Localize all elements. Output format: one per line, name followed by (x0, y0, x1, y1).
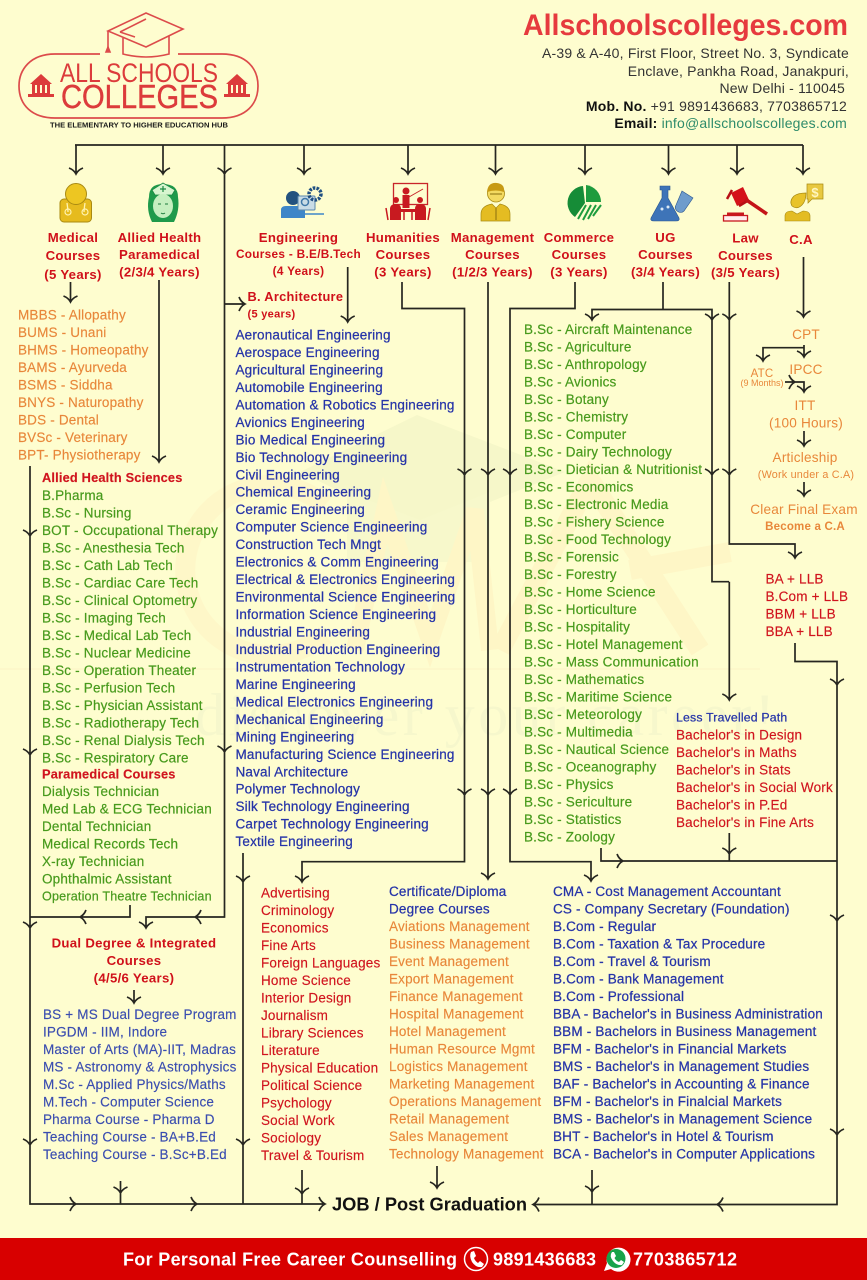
arrow: humanities list to job (295, 1170, 309, 1204)
list: medical: BDS - Dental (18, 412, 99, 428)
icon: C.A (785, 184, 823, 221)
list: UG B.Sc courses: B.Sc - Electronic Media (524, 497, 669, 512)
watermark (0, 415, 778, 748)
list: commerce: CMA - Cost Management Accountant (553, 884, 781, 899)
final exam: Clear Final Exam (750, 502, 858, 517)
heading: UG: UG (655, 230, 676, 245)
heading: allied health: (2/3/4 Years) (119, 264, 200, 280)
ATC: ATC (751, 368, 773, 380)
B. Architecture heading: B. Architecture (248, 289, 343, 304)
address: A-39 & A-40, First Floor, Street No. 3, Syndicate (542, 45, 849, 61)
heading: humanities: Humanities (366, 230, 440, 245)
list: UG B.Sc courses: B.Sc - Fishery Science (524, 514, 665, 530)
list: UG B.Sc courses (524, 322, 702, 844)
list: UG B.Sc courses: B.Sc - Agriculture (524, 340, 632, 354)
list: law integrated: B.Com + LLB (766, 589, 848, 604)
icon: humanities (386, 184, 430, 220)
list: allied health sciences: B.Sc - Renal Dialysis Tech (42, 733, 205, 748)
heading: management: Management (451, 230, 535, 245)
list: management: Marketing Management (389, 1076, 534, 1092)
icon: UG flask (651, 186, 693, 221)
CPT: CPT (792, 327, 820, 342)
icon: management (481, 183, 510, 221)
heading: commerce: Commerce (544, 230, 614, 245)
list: dual degree: Pharma Course - Pharma D (43, 1112, 215, 1127)
logo: left building (28, 74, 54, 97)
list: paramedical courses: Dialysis Technician (42, 784, 159, 799)
list: commerce: BFM - Bachelor's in Finalcial Markets (553, 1094, 782, 1109)
list: commerce: BCA - Bachelor's in Computer Applications (553, 1146, 815, 1162)
arrow: allied health to list (152, 280, 166, 462)
list: UG B.Sc courses: B.Sc - Physics (524, 777, 614, 792)
list: engineering: Automation & Robotics Engineering (236, 397, 455, 412)
list: management: Human Resource Mgmt (389, 1042, 535, 1056)
Articleship note: (Work under a C.A) (758, 469, 854, 481)
list: management: Finance Management (389, 989, 523, 1004)
contact header (523, 9, 849, 131)
list: engineering: Industrial Production Engineering (236, 642, 440, 657)
list: humanities: Criminology (261, 903, 334, 918)
arrow: dual degree heading to list (127, 990, 141, 1003)
list: management: Logistics Management (389, 1059, 528, 1074)
list: allied health sciences: B.Sc - Clinical Optometry (42, 593, 197, 608)
address: Email: info@allschoolscolleges.com (614, 115, 847, 131)
list: allied health sciences: B.Sc - Radiotherapy Tech (42, 716, 199, 730)
list: engineering: Textile Engineering (236, 834, 353, 849)
connector: law (722, 282, 802, 700)
connector: top bar with arrows to categories (69, 145, 810, 174)
list: UG B.Sc courses: B.Sc - Hotel Management (524, 637, 683, 652)
list: commerce: B.Com - Regular (553, 919, 657, 934)
list: management: Hospital Management (389, 1006, 524, 1022)
address: Mob. No. +91 9891436683, 7703865712 (586, 98, 847, 114)
list: allied health sciences (42, 470, 218, 766)
list: engineering: Mechanical Engineering (236, 712, 384, 727)
heading: humanities (366, 230, 440, 280)
list: dual degree: M.Sc - Applied Physics/Maths (43, 1077, 226, 1092)
arrow: commerce list to job (585, 1170, 599, 1204)
list: law integrated: BBM + LLB (766, 606, 836, 622)
job / post graduation: JOB / Post Graduation (332, 1194, 527, 1214)
connector: left trunk to job (23, 466, 325, 1211)
list: UG B.Sc courses: B.Sc - Nautical Science (524, 742, 669, 757)
list: allied health sciences: B.Pharma (42, 488, 104, 503)
list: allied health sciences: B.Sc - Cath Lab Tech (42, 558, 173, 573)
list: allied health sciences: B.Sc - Perfusion Tech (42, 680, 175, 696)
heading: commerce: Courses (552, 247, 606, 262)
heading: medical courses: Courses (46, 248, 100, 263)
list: UG B.Sc courses: B.Sc - Zoology (524, 830, 615, 844)
list: commerce: BFM - Bachelor's in Financial Markets (553, 1042, 787, 1056)
become a C.A: Become a C.A (765, 521, 845, 533)
list: allied health sciences: B.Sc - Medical Lab Tech (42, 628, 191, 643)
B. Architecture heading: (5 years) (248, 309, 295, 321)
arrow: C.A to CPT (796, 257, 810, 317)
list: UG B.Sc courses: B.Sc - Hospitality (524, 620, 630, 634)
Articleship: Articleship (773, 450, 837, 465)
list: engineering: Medical Electronics Engineering (236, 694, 433, 709)
list: allied health sciences: BOT - Occupational Therapy (42, 523, 218, 538)
sub-heading: allied health sciences: Allied Health Sciences (42, 470, 183, 485)
list: commerce: B.Com - Travel & Tourism (553, 954, 711, 969)
heading: medical courses: (5 Years) (44, 267, 102, 282)
list: commerce: B.Com - Bank Management (553, 972, 724, 986)
list: engineering: Aerospace Engineering (236, 345, 380, 360)
list: less travelled path: Bachelor's in Fine Arts (676, 815, 814, 830)
arrow: dual degree list to job (114, 1181, 128, 1204)
IPCC: IPCC (789, 362, 823, 377)
sub-list: certificate and degree: Degree Courses (389, 902, 490, 916)
list: medical: MBBS - Allopathy (18, 308, 126, 322)
list: management: Aviations Management (389, 919, 530, 934)
connector: humanities (295, 282, 472, 882)
heading: engineering: Courses - B.E/B.Tech (236, 247, 361, 261)
list: commerce: BHT - Bachelor's in Hotel & Tourism (553, 1129, 774, 1144)
list: engineering: Industrial Engineering (236, 624, 370, 640)
arrow: less travelled (722, 833, 736, 861)
list: engineering: Chemical Engineering (236, 485, 371, 500)
list: engineering: Construction Tech Mngt (236, 537, 381, 552)
list: engineering: Marine Engineering (236, 677, 356, 692)
list: commerce: BAF - Bachelor's in Accounting & Finance (553, 1076, 810, 1092)
list: humanities: Interior Design (261, 990, 352, 1006)
heading: law (711, 230, 780, 280)
heading: engineering: Engineering (259, 230, 338, 245)
phone number: 9891436683 (493, 1250, 596, 1270)
connector: paramedical to trunk (30, 905, 130, 924)
list: management: Sales Management (389, 1129, 508, 1144)
ITT: ITT (795, 398, 815, 413)
list: law integrated: BBA + LLB (766, 624, 833, 639)
list: humanities: Travel & Tourism (261, 1148, 364, 1163)
list: commerce: B.Com - Taxation & Tax Procedure (553, 936, 765, 952)
heading: UG (631, 230, 700, 280)
dual degree heading (52, 936, 216, 986)
list: paramedical courses: Ophthalmic Assistant (42, 872, 172, 886)
list: engineering: Avionics Engineering (236, 415, 365, 430)
icon: commerce (568, 185, 601, 220)
icon: nurse (148, 183, 178, 222)
whatsapp number: 7703865712 (633, 1250, 737, 1270)
list: commerce: BBA - Bachelor's in Business Administration (553, 1006, 823, 1022)
connector: trunk to dual degree (139, 145, 232, 928)
list: UG B.Sc courses: B.Sc - Forestry (524, 567, 617, 582)
connector: CPT to IPCC and ATC (756, 345, 811, 361)
ATC duration: (9 Months) (740, 378, 784, 388)
list: management: Retail Management (389, 1112, 509, 1126)
list: engineering: Agricultural Engineering (236, 362, 383, 377)
logo: graduation cap (106, 13, 183, 57)
list: management: Business Management (389, 936, 530, 952)
heading: management (451, 230, 535, 280)
heading: allied health: Paramedical (119, 247, 200, 262)
list: UG B.Sc courses: B.Sc - Economics (524, 480, 633, 494)
list: less travelled path: Bachelor's in Maths (676, 745, 797, 760)
icon: whatsapp (604, 1248, 631, 1272)
list: UG B.Sc courses: B.Sc - Multimedia (524, 724, 633, 740)
list: engineering: Automobile Engineering (236, 380, 383, 395)
list: UG B.Sc courses: B.Sc - Botany (524, 392, 609, 407)
list: allied health sciences: B.Sc - Operation Theater (42, 663, 196, 678)
list: allied health sciences: B.Sc - Nuclear Medicine (42, 646, 191, 660)
list: UG B.Sc courses: B.Sc - Home Science (524, 584, 656, 600)
list: dual degree: MS - Astronomy & Astrophysics (43, 1060, 237, 1074)
B. Architecture heading (248, 289, 343, 321)
logo (19, 13, 258, 130)
list: management: Event Management (389, 954, 509, 969)
heading: humanities: Courses (376, 247, 430, 262)
list: medical: BAMS - Ayurveda (18, 360, 127, 375)
heading: commerce (544, 230, 614, 280)
watermark: discover your career! (195, 682, 778, 748)
list: UG B.Sc courses: B.Sc - Anthropology (524, 357, 647, 372)
heading: medical courses (44, 230, 102, 282)
list: humanities: Foreign Languages (261, 956, 380, 970)
list: commerce: BMS - Bachelor's in Management Science (553, 1112, 812, 1126)
list: humanities: Literature (261, 1043, 320, 1058)
sub-list: certificate and degree (389, 884, 507, 916)
icon: law gavel (724, 187, 767, 221)
list: engineering: Polymer Technology (236, 782, 360, 797)
list: management (389, 884, 544, 1162)
list: allied health sciences: B.Sc - Nursing (42, 506, 132, 520)
list: engineering: Information Science Engineering (236, 607, 436, 622)
list: commerce: B.Com - Professional (553, 989, 684, 1004)
list: less travelled path: Bachelor's in Stats (676, 762, 791, 778)
list: engineering: Electrical & Electronics Engineering (236, 572, 455, 587)
list: engineering: Environmental Science Engineering (236, 590, 455, 604)
dual degree heading: Dual Degree & Integrated (52, 936, 216, 950)
connector: zoology to right trunk (601, 848, 837, 868)
list: allied health sciences: B.Sc - Respiratory Care (42, 750, 189, 766)
list: paramedical courses: X-ray Technician (42, 854, 144, 869)
list: humanities: Fine Arts (261, 938, 316, 953)
logo: right building (224, 74, 250, 97)
list: dual degree: M.Tech - Computer Science (43, 1094, 214, 1110)
dual degree heading: Courses (107, 953, 161, 968)
list: UG B.Sc courses: B.Sc - Maritime Science (524, 690, 672, 704)
list: UG B.Sc courses: B.Sc - Mathematics (524, 672, 644, 687)
list: commerce (553, 884, 823, 1162)
sub-heading: less travelled: Less Travelled Path (676, 711, 787, 725)
list: UG B.Sc courses: B.Sc - Sericulture (524, 794, 632, 810)
list: commerce: BMS - Bachelor's in Management Studies (553, 1059, 809, 1074)
list: engineering: Computer Science Engineering (236, 520, 427, 535)
list: UG B.Sc courses: B.Sc - Dairy Technology (524, 444, 672, 460)
list: paramedical courses: Med Lab & ECG Technician (42, 802, 212, 816)
icon: C.A: $ (811, 185, 819, 200)
list: engineering (236, 328, 455, 849)
list: UG B.Sc courses: B.Sc - Meteorology (524, 707, 642, 722)
list: UG B.Sc courses: B.Sc - Dietician & Nutritionist (524, 462, 702, 477)
address (542, 45, 849, 131)
icon: phone (464, 1248, 488, 1270)
list: medical: BVSc - Veterinary (18, 430, 128, 445)
list: engineering: Silk Technology Engineering (236, 799, 410, 814)
list: management: Operations Management (389, 1094, 541, 1109)
list: UG B.Sc courses: B.Sc - Mass Communication (524, 654, 699, 670)
heading: commerce: (3 Years) (550, 264, 608, 280)
list: commerce: CS - Company Secretary (Foundation) (553, 902, 790, 916)
list: humanities: Library Sciences (261, 1026, 364, 1040)
list: medical: BSMS - Siddha (18, 378, 113, 392)
list: humanities: Home Science (261, 973, 351, 988)
list: engineering: Manufacturing Science Engineering (236, 747, 455, 762)
list: less travelled path: Bachelor's in P.Ed (676, 798, 787, 812)
heading: law: Courses (718, 248, 773, 263)
icon: medical (60, 184, 92, 222)
icon: engineering (281, 188, 324, 218)
list: management: Technology Management (389, 1146, 544, 1162)
arrow: medical to list (64, 282, 78, 302)
list: paramedical courses: Operation Theatre Technician (42, 890, 212, 904)
heading: medical courses: Medical (48, 230, 98, 245)
list: UG B.Sc courses: B.Sc - Food Technology (524, 532, 671, 547)
list: UG B.Sc courses: B.Sc - Statistics (524, 812, 622, 827)
arrow: management list down (430, 1166, 444, 1188)
list: less travelled path: Bachelor's in Design (676, 728, 802, 742)
connector: BBA to job (533, 643, 844, 1212)
list: UG B.Sc courses: B.Sc - Avionics (524, 374, 617, 390)
list: commerce: BBM - Bachelors in Business Management (553, 1024, 817, 1039)
list: dual degree: Master of Arts (MA)-IIT, Madras (43, 1042, 236, 1057)
list: UG B.Sc courses: B.Sc - Aircraft Maintenance (524, 322, 692, 337)
logo: pill outline (19, 54, 258, 118)
list: paramedical courses: Medical Records Tech (42, 836, 178, 852)
list: humanities: Political Science (261, 1078, 362, 1093)
list: UG B.Sc courses: B.Sc - Oceanography (524, 760, 657, 774)
footer band (0, 1238, 867, 1280)
dual degree heading: (4/5/6 Years) (94, 970, 174, 986)
list: engineering: Instrumentation Technology (236, 659, 405, 674)
list: medical (18, 308, 149, 462)
heading: humanities: (3 Years) (374, 264, 432, 280)
list: humanities (261, 886, 380, 1163)
list: UG B.Sc courses: B.Sc - Horticulture (524, 602, 637, 617)
arrow: ITT to articleship (797, 431, 811, 446)
logo: COLLEGES (61, 78, 218, 115)
connector: commerce (503, 282, 598, 881)
list: medical: BHMS - Homeopathy (18, 342, 149, 358)
site title: Allschoolscolleges.com (523, 9, 848, 42)
list: engineering: Civil Engineering (236, 467, 340, 482)
address: New Delhi - 110045 (719, 80, 845, 96)
list: medical: BPT- Physiotherapy (18, 448, 141, 462)
heading: management: Courses (465, 247, 520, 262)
footer text: For Personal Free Career Counselling (123, 1250, 457, 1270)
list: medical: BUMS - Unani (18, 325, 106, 340)
list: less travelled path (676, 711, 833, 830)
heading: engineering: (4 Years) (273, 264, 324, 278)
list: law integrated (766, 572, 848, 639)
list: engineering: Aeronautical Engineering (236, 328, 391, 342)
list: dual degree: Teaching Course - B.Sc+B.Ed (43, 1147, 227, 1162)
sub-heading: paramedical: Paramedical Courses (42, 767, 176, 782)
ITT hours: (100 Hours) (769, 416, 843, 430)
list: engineering: Ceramic Engineering (236, 502, 365, 517)
list: management: Hotel Management (389, 1024, 506, 1039)
C.A pathway (740, 327, 858, 533)
logo: tagline: THE ELEMENTARY TO HIGHER EDUCATION HUB (50, 122, 228, 130)
list: medical: BNYS - Naturopathy (18, 395, 144, 410)
list: allied health sciences: B.Sc - Imaging Tech (42, 610, 166, 626)
list: humanities: Social Work (261, 1113, 335, 1128)
list: management: Export Management (389, 972, 514, 986)
list: UG B.Sc courses: B.Sc - Forensic (524, 550, 619, 564)
list: allied health sciences: B.Sc - Cardiac Care Tech (42, 576, 198, 590)
list: dual degree: Teaching Course - BA+B.Ed (43, 1130, 216, 1144)
heading: management: (1/2/3 Years) (452, 264, 533, 280)
sub-list: certificate and degree: Certificate/Diploma (389, 884, 507, 899)
list: allied health sciences: B.Sc - Anesthesia Tech (42, 540, 185, 556)
connector: UG (585, 282, 729, 582)
list: engineering: Carpet Technology Engineering (236, 817, 429, 832)
list: law integrated: BA + LLB (766, 572, 824, 586)
list: engineering: Bio Medical Engineering (236, 432, 385, 447)
list: humanities: Physical Education (261, 1060, 378, 1076)
address: Enclave, Pankha Road, Janakpuri, (628, 63, 849, 79)
connector: engineering list to job (236, 853, 250, 1204)
heading: C.A: C.A (789, 232, 813, 247)
list: humanities: Economics (261, 920, 329, 936)
list: humanities: Psychology (261, 1096, 332, 1110)
heading: law: Law (732, 230, 759, 246)
list: engineering: Bio Technology Engineering (236, 450, 407, 465)
list: humanities: Advertising (261, 886, 330, 900)
list: engineering: Naval Architecture (236, 764, 348, 779)
heading: allied health (118, 230, 201, 280)
arrow: engineering to list (341, 267, 355, 322)
list: humanities: Journalism (261, 1008, 328, 1023)
list: less travelled path: Bachelor's in Social Work (676, 780, 833, 795)
connector: management (481, 282, 495, 879)
list: UG B.Sc courses: B.Sc - Computer (524, 427, 627, 442)
list: paramedical courses: Dental Technician (42, 819, 151, 834)
list: allied health sciences: B.Sc - Physician Assistant (42, 698, 203, 713)
list: dual degree: BS + MS Dual Degree Program (43, 1007, 237, 1022)
list: humanities: Sociology (261, 1130, 321, 1146)
list: engineering: Mining Engineering (236, 729, 354, 744)
list: UG B.Sc courses: B.Sc - Chemistry (524, 410, 628, 424)
list: engineering: Electronics & Comm Engineering (236, 555, 439, 570)
list: dual degree: IPGDM - IIM, Indore (43, 1024, 167, 1040)
arrow: trunk to architecture (224, 297, 245, 311)
heading: UG: Courses (638, 247, 693, 262)
logo: wordmark: ALL SCHOOLS (60, 58, 218, 88)
heading: engineering (236, 230, 361, 278)
list: dual degree (43, 1007, 237, 1162)
list: paramedical courses (42, 767, 212, 904)
connector: ATC to IPCC (785, 375, 811, 392)
arrow: articleship to final exam (797, 482, 811, 496)
heading: law: (3/5 Years) (711, 265, 780, 280)
heading: UG: (3/4 Years) (631, 264, 700, 280)
heading: allied health: Allied Health (118, 230, 201, 245)
